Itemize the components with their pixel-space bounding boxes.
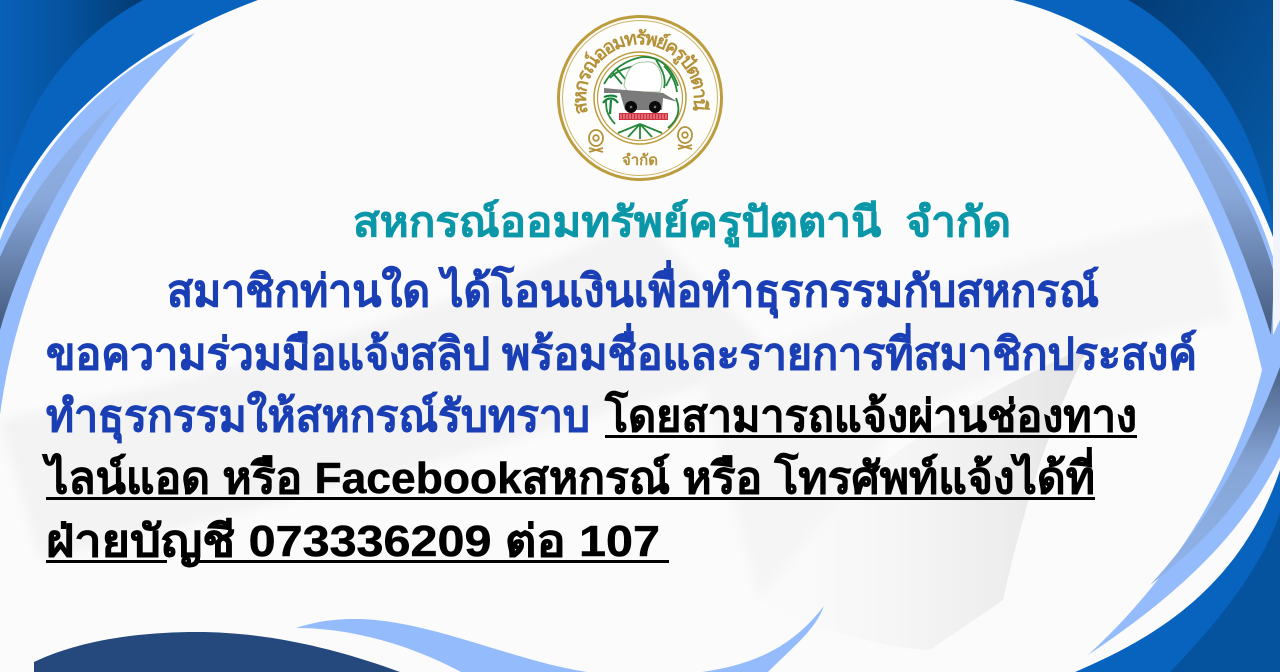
underlined black line 5: ฝ่ายบัญชี 073336209 ต่อ 107 bbox=[46, 517, 660, 567]
logo ring text: สหกรณ์ออมทรัพย์ครูปัตตานี bbox=[574, 28, 710, 114]
bottom wave: light blue bbox=[296, 619, 587, 672]
dark blue corner right bbox=[1128, 0, 1273, 227]
logo red base bbox=[619, 113, 668, 120]
right top blue band bbox=[1013, 0, 1273, 237]
underlined black line 4: ไลน์แอด หรือ Facebookสหกรณ์ หรือ โทรศัพท์แจ้งได้ที่ bbox=[42, 447, 1095, 503]
logo hill bbox=[624, 62, 662, 92]
left light blue swoosh bbox=[0, 33, 195, 415]
right grey gradient stripe upper bbox=[1150, 78, 1273, 335]
right light blue swoosh bbox=[1075, 33, 1280, 655]
logo palm bbox=[603, 96, 618, 114]
body text blue line 3: ทำธุรกรรมให้สหกรณ์รับทราบ bbox=[46, 390, 590, 444]
right edge strip bbox=[1273, 0, 1280, 335]
underlined black line 3: โดยสามารถแจ้งผ่านช่องทาง bbox=[604, 389, 1137, 441]
body text blue line 1: สมาชิกท่านใด ได้โอนเงินเพื่อทำธุรกรรมกับสหกรณ์ bbox=[167, 260, 1099, 319]
dark blue corner bottom right bbox=[1170, 513, 1280, 672]
logo bottom text: จำกัด bbox=[622, 152, 658, 169]
title: สหกรณ์ออมทรัพย์ครูปัตตานี จำกัด bbox=[353, 199, 1011, 248]
right grey gradient stripe lower bbox=[1150, 367, 1280, 585]
logo hill lines bbox=[604, 57, 678, 139]
left grey gradient stripe bbox=[0, 95, 125, 330]
left top blue band bbox=[0, 0, 258, 230]
logo cannon bbox=[604, 88, 678, 113]
right bottom blue band bbox=[1075, 470, 1280, 672]
body text blue line 2: ขอความร่วมมือแจ้งสลิป พร้อมชื่อและรายการที่สมาชิกประสงค์ bbox=[46, 323, 1197, 379]
dark blue corner left bbox=[0, 0, 143, 213]
logo bbox=[557, 15, 723, 181]
logo right ornament bbox=[678, 127, 692, 149]
logo left ornament bbox=[589, 130, 603, 152]
bottom wave: navy bbox=[34, 632, 400, 672]
bottom wave: light blue tip bbox=[702, 606, 824, 672]
